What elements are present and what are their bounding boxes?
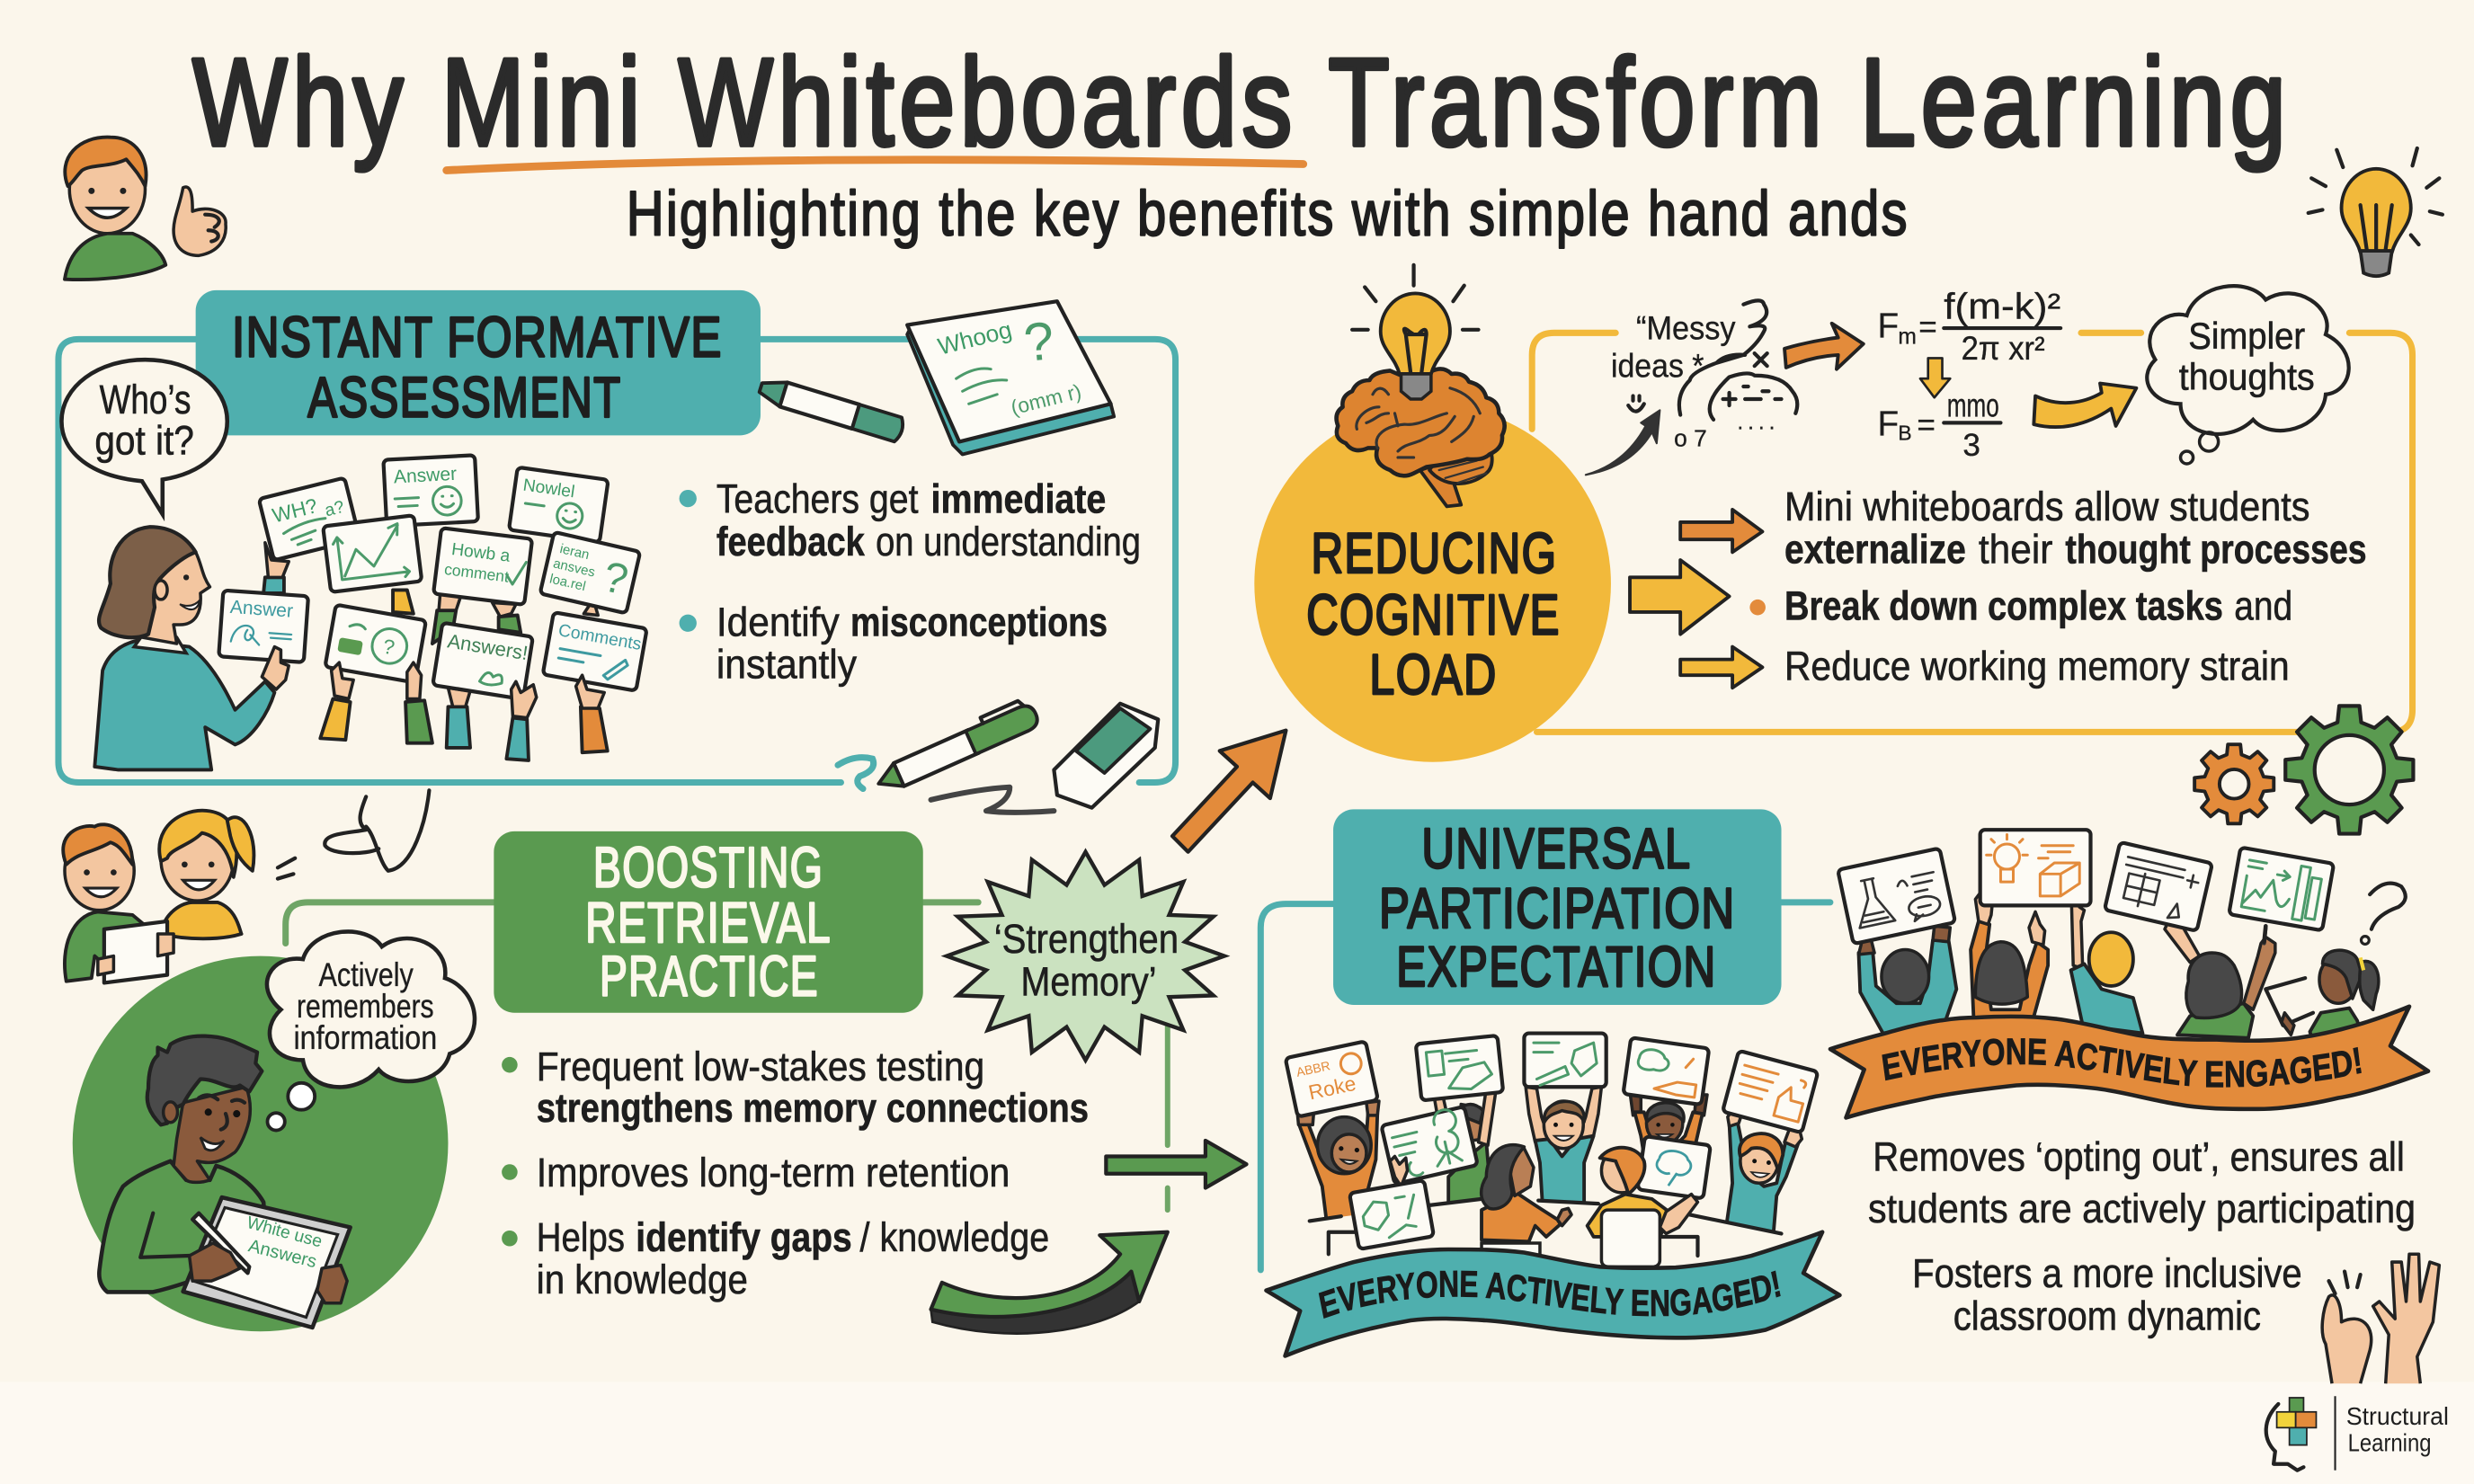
illustration: students holding up mini whiteboards: [218, 455, 647, 760]
speech bubble: who's got it: Who’s: [100, 377, 191, 422]
board: answer: Answer: [393, 464, 458, 487]
icon: eraser: [1054, 704, 1158, 808]
icon: boy with thumbs up: [65, 138, 226, 280]
bullets: cognitive load: Break down complex tasks: [1784, 583, 2223, 629]
text: universal participation benefits: Fosters a more inclusive: [1912, 1250, 2302, 1296]
arrow: small yellow list arrow: [1680, 647, 1762, 688]
board: cloud and arrow: [1624, 1037, 1709, 1105]
heading: instant formative assessment: INSTANT FORMATIVE: [232, 307, 723, 369]
student right boy: [1726, 1107, 1802, 1233]
bullets: retrieval practice: Helps: [537, 1214, 625, 1260]
bullets: cognitive load: and: [2234, 583, 2292, 629]
thought cloud: simpler thoughts: thoughts: [2179, 356, 2315, 398]
subtitle: Highlighting the key benefits with simple hand ands: [627, 178, 1909, 249]
thought cloud: actively remembers information: remembers: [297, 988, 434, 1025]
board: nowlel: [509, 467, 609, 542]
arrow: orange to formula: [1784, 324, 1864, 369]
arrow: orange diagonal: [1172, 731, 1286, 852]
board: answer drawing: Answer: [229, 597, 294, 622]
bullets: formative assessment: [680, 475, 1141, 688]
illustration: classroom students with boards: [1286, 1034, 1818, 1281]
doodle: messy ideas: [1611, 300, 1797, 452]
board: question: loa.rel: [548, 572, 587, 594]
bullets: retrieval practice: / knowledge: [860, 1214, 1049, 1260]
equation: formula simplification: =: [1917, 407, 1936, 442]
board: who: [259, 477, 360, 560]
equation: formula simplification: f(m-k)²: [1944, 286, 2060, 327]
equation: formula simplification: 2π xr²: [1962, 330, 2045, 367]
bullets: retrieval practice: in knowledge: [537, 1257, 748, 1302]
arrow: green curved: [931, 1232, 1168, 1334]
bullets: retrieval practice: Frequent low-stakes testing: [537, 1044, 984, 1089]
heading: boosting retrieval practice: BOOSTING: [593, 836, 823, 899]
icon: tilted whiteboard: Whoog: [935, 315, 1014, 360]
board: question: ?: [599, 553, 632, 605]
board: answers: Answers!: [446, 629, 530, 664]
equation: formula simplification: [1878, 286, 2060, 463]
speech bubble: who's got it: [61, 360, 227, 514]
arrow: orange list arrow: [1680, 510, 1762, 552]
arrow: yellow curved to simpler thoughts: [2033, 383, 2136, 427]
student center boy: [1526, 1087, 1601, 1214]
equation: formula simplification: =: [1918, 310, 1937, 345]
banner: everyone actively engaged teal: EVERYONE ACTIVELY ENGAGED!: [1318, 1271, 1781, 1319]
doodle: scribble: [931, 787, 1054, 813]
heading: reducing cognitive load circle: LOAD: [1369, 644, 1498, 706]
bullets: retrieval practice: strengthens memory connections: [537, 1085, 1089, 1131]
heading: boosting retrieval practice: PRACTICE: [600, 945, 819, 1008]
banner: everyone actively engaged orange: EVERYONE ACTIVELY ENGAGED!: [1882, 1038, 2362, 1088]
bullets: formative assessment: instantly: [716, 642, 857, 688]
bullets: formative assessment: misconceptions: [850, 599, 1108, 644]
board: question: ansves: [552, 556, 596, 581]
equation: formula simplification: F: [1878, 404, 1899, 443]
panel: universal participation frame lines: [1260, 902, 1830, 1270]
arrow: green straight: [1106, 1141, 1247, 1188]
heading: universal participation expectation: PARTICIPATION: [1379, 877, 1736, 940]
logo: structural learning: Learning: [2348, 1429, 2432, 1457]
panel: reducing cognitive load frame: [1532, 333, 2413, 732]
icon: tilted whiteboard: (omm r): [1009, 379, 1083, 419]
bullets: formative assessment: on understanding: [876, 519, 1141, 564]
heading: universal participation expectation: UNIVERSAL: [1421, 817, 1691, 880]
icon: tilted whiteboard: ?: [1021, 310, 1056, 373]
board: lock and question: ?: [381, 635, 396, 659]
board: question: ieran: [558, 542, 591, 563]
icon: green gear: [2285, 706, 2413, 834]
student behind board green: [1433, 1085, 1496, 1231]
icon: orange gear: [2194, 744, 2274, 823]
panel: instant formative assessment frame: [58, 339, 1176, 789]
board: lock and question: [325, 605, 426, 682]
board: comments: [543, 612, 647, 691]
icon: thumbs up and raised hand: [2322, 1254, 2439, 1383]
bullets: retrieval practice: identify gaps: [636, 1214, 852, 1260]
panel: boosting retrieval frame lines: [286, 902, 1168, 1210]
student 4 dark hair: [2165, 909, 2275, 1038]
equation: formula simplification: F: [1878, 307, 1899, 346]
equation: formula simplification: B: [1898, 422, 1912, 445]
illustration: student thinking in green circle: White use: [245, 1213, 324, 1251]
illustration: student thinking in green circle: [73, 956, 448, 1331]
board: orange notes: [1286, 1041, 1378, 1117]
board: diagram: [2105, 842, 2212, 931]
arrow: large yellow list arrow: [1630, 560, 1730, 635]
heading: instant formative assessment: [196, 290, 761, 435]
board: thumbs up: [1722, 1051, 1818, 1133]
bullets: cognitive load: externalize: [1784, 527, 1966, 573]
speech bubble: who's got it: got it?: [94, 417, 194, 463]
board: answer: [383, 455, 478, 526]
icon: brain with lightbulb: [1337, 265, 1505, 506]
heading: instant formative assessment: ASSESSMENT: [307, 366, 622, 429]
illustration: student thinking in green circle: Answers: [246, 1236, 318, 1272]
equation: formula simplification: m: [1898, 325, 1917, 350]
board: graph: [323, 515, 422, 592]
student 5 side view: [2265, 950, 2379, 1041]
heading: universal participation expectation: [1333, 809, 1782, 1005]
text: universal participation benefits: [1868, 1133, 2416, 1339]
arrow: dark curved to messy ideas: [1586, 410, 1660, 475]
icon: marker pen: [757, 376, 905, 443]
bullets: formative assessment: Identify: [716, 599, 840, 644]
board: comment: [433, 528, 532, 605]
bullets: cognitive load: Mini whiteboards allow students: [1784, 484, 2309, 529]
hands over boards: [262, 647, 604, 718]
board: who: a?: [323, 498, 346, 520]
board: comment: comment: [443, 560, 510, 586]
board: orange notes: Roke: [1306, 1071, 1358, 1104]
wave hand: [1390, 1156, 1408, 1186]
text: universal participation benefits: students are actively participating: [1868, 1186, 2416, 1231]
board: orange notes: ABBR: [1295, 1058, 1331, 1080]
doodle: messy ideas: ideas *: [1611, 347, 1704, 384]
icon: two students with whiteboard: [63, 811, 254, 982]
board: who: WH?: [270, 493, 320, 528]
thought cloud: actively remembers information: Actively: [319, 956, 414, 993]
text: universal participation benefits: Removes ‘opting out’, ensures all: [1873, 1133, 2405, 1179]
banner: everyone actively engaged orange: [1829, 1005, 2431, 1120]
bullets: formative assessment: immediate: [931, 475, 1106, 521]
board: green sketch: [1416, 1035, 1503, 1100]
text: universal participation benefits: classroom dynamic: [1953, 1293, 2261, 1339]
student 1 teal: [1859, 926, 1956, 1035]
heading: boosting retrieval practice: RETRIEVAL: [585, 892, 832, 955]
student 3 yellow hair: [2071, 899, 2142, 1034]
banner: everyone actively engaged teal: [1264, 1230, 1842, 1358]
heading: reducing cognitive load circle: COGNITIVE: [1306, 584, 1561, 647]
board: scribbles: [1349, 1180, 1434, 1249]
front woman: [1482, 1145, 1571, 1241]
logo: structural learning: [2266, 1396, 2449, 1471]
thought cloud: actively remembers information: information: [293, 1019, 437, 1056]
board: answer drawing: [218, 591, 308, 662]
board: comment: Howb a: [450, 540, 512, 566]
board: comments: Comments: [556, 621, 643, 654]
board: nowlel: Nowlel: [521, 475, 576, 502]
student 2 orange: [1971, 893, 2048, 1022]
doodle: loose lines: [325, 790, 429, 871]
heading: universal participation expectation: EXPECTATION: [1396, 936, 1717, 999]
title underline: [447, 160, 1304, 171]
question mark: [2361, 884, 2406, 944]
front boy: [1482, 1148, 1697, 1266]
bullets: cognitive load: Reduce working memory strain: [1784, 643, 2290, 689]
board: lightbulb: [1980, 830, 2090, 905]
bullets: cognitive load: [1749, 484, 2367, 689]
bullets: retrieval practice: [502, 1044, 1089, 1302]
thought cloud: simpler thoughts: [2147, 286, 2349, 464]
icon: tilted whiteboard: [907, 301, 1114, 454]
doodle: messy ideas: ....: [1737, 410, 1775, 434]
board: tree front: [1638, 1136, 1711, 1198]
bullets: formative assessment: feedback: [716, 519, 865, 564]
student dark boy: [1630, 1092, 1707, 1176]
bullets: retrieval practice: Improves long-term retention: [537, 1150, 1010, 1195]
table: [1310, 1199, 1782, 1281]
student left girl: [1297, 1101, 1379, 1224]
equation: formula simplification: 3: [1962, 428, 1980, 463]
board: chart: [2229, 848, 2334, 930]
thought cloud: actively remembers information: [267, 931, 475, 1087]
logo: structural learning: Structural: [2346, 1402, 2449, 1430]
arms and sleeves behind boards: [263, 543, 608, 760]
heading: reducing cognitive load circle: [1254, 405, 1611, 762]
bullets: formative assessment: Teachers get: [716, 475, 919, 521]
board: tree sketch: [1381, 1105, 1478, 1184]
callout: strengthen memory starburst: Memory’: [1021, 958, 1156, 1004]
icon: green pen: [871, 697, 1041, 795]
callout: strengthen memory starburst: ‘Strengthen: [994, 916, 1179, 962]
icon: lightbulb top right: [2309, 148, 2443, 276]
callout: strengthen memory starburst: [947, 852, 1224, 1060]
board: green shapes: [1524, 1034, 1606, 1087]
equation: formula simplification: mmo: [1947, 387, 1999, 423]
heading: boosting retrieval practice: [494, 831, 923, 1013]
board: answers: [432, 623, 533, 699]
doodle: dashes: [278, 858, 295, 879]
doodle: messy ideas: o 7: [1674, 425, 1707, 452]
board: flask: [1838, 849, 1955, 944]
heading: reducing cognitive load circle: REDUCING: [1311, 522, 1557, 585]
bullets: cognitive load: thought processes: [2065, 527, 2367, 573]
illustration: teacher: [94, 527, 274, 769]
board: question: [540, 532, 640, 613]
doodle: messy ideas: “Messy: [1636, 309, 1736, 346]
illustration: students back view with boards: [1838, 830, 2406, 1041]
bullets: cognitive load: their: [1979, 527, 2052, 573]
thought cloud: simpler thoughts: Simpler: [2188, 315, 2305, 357]
